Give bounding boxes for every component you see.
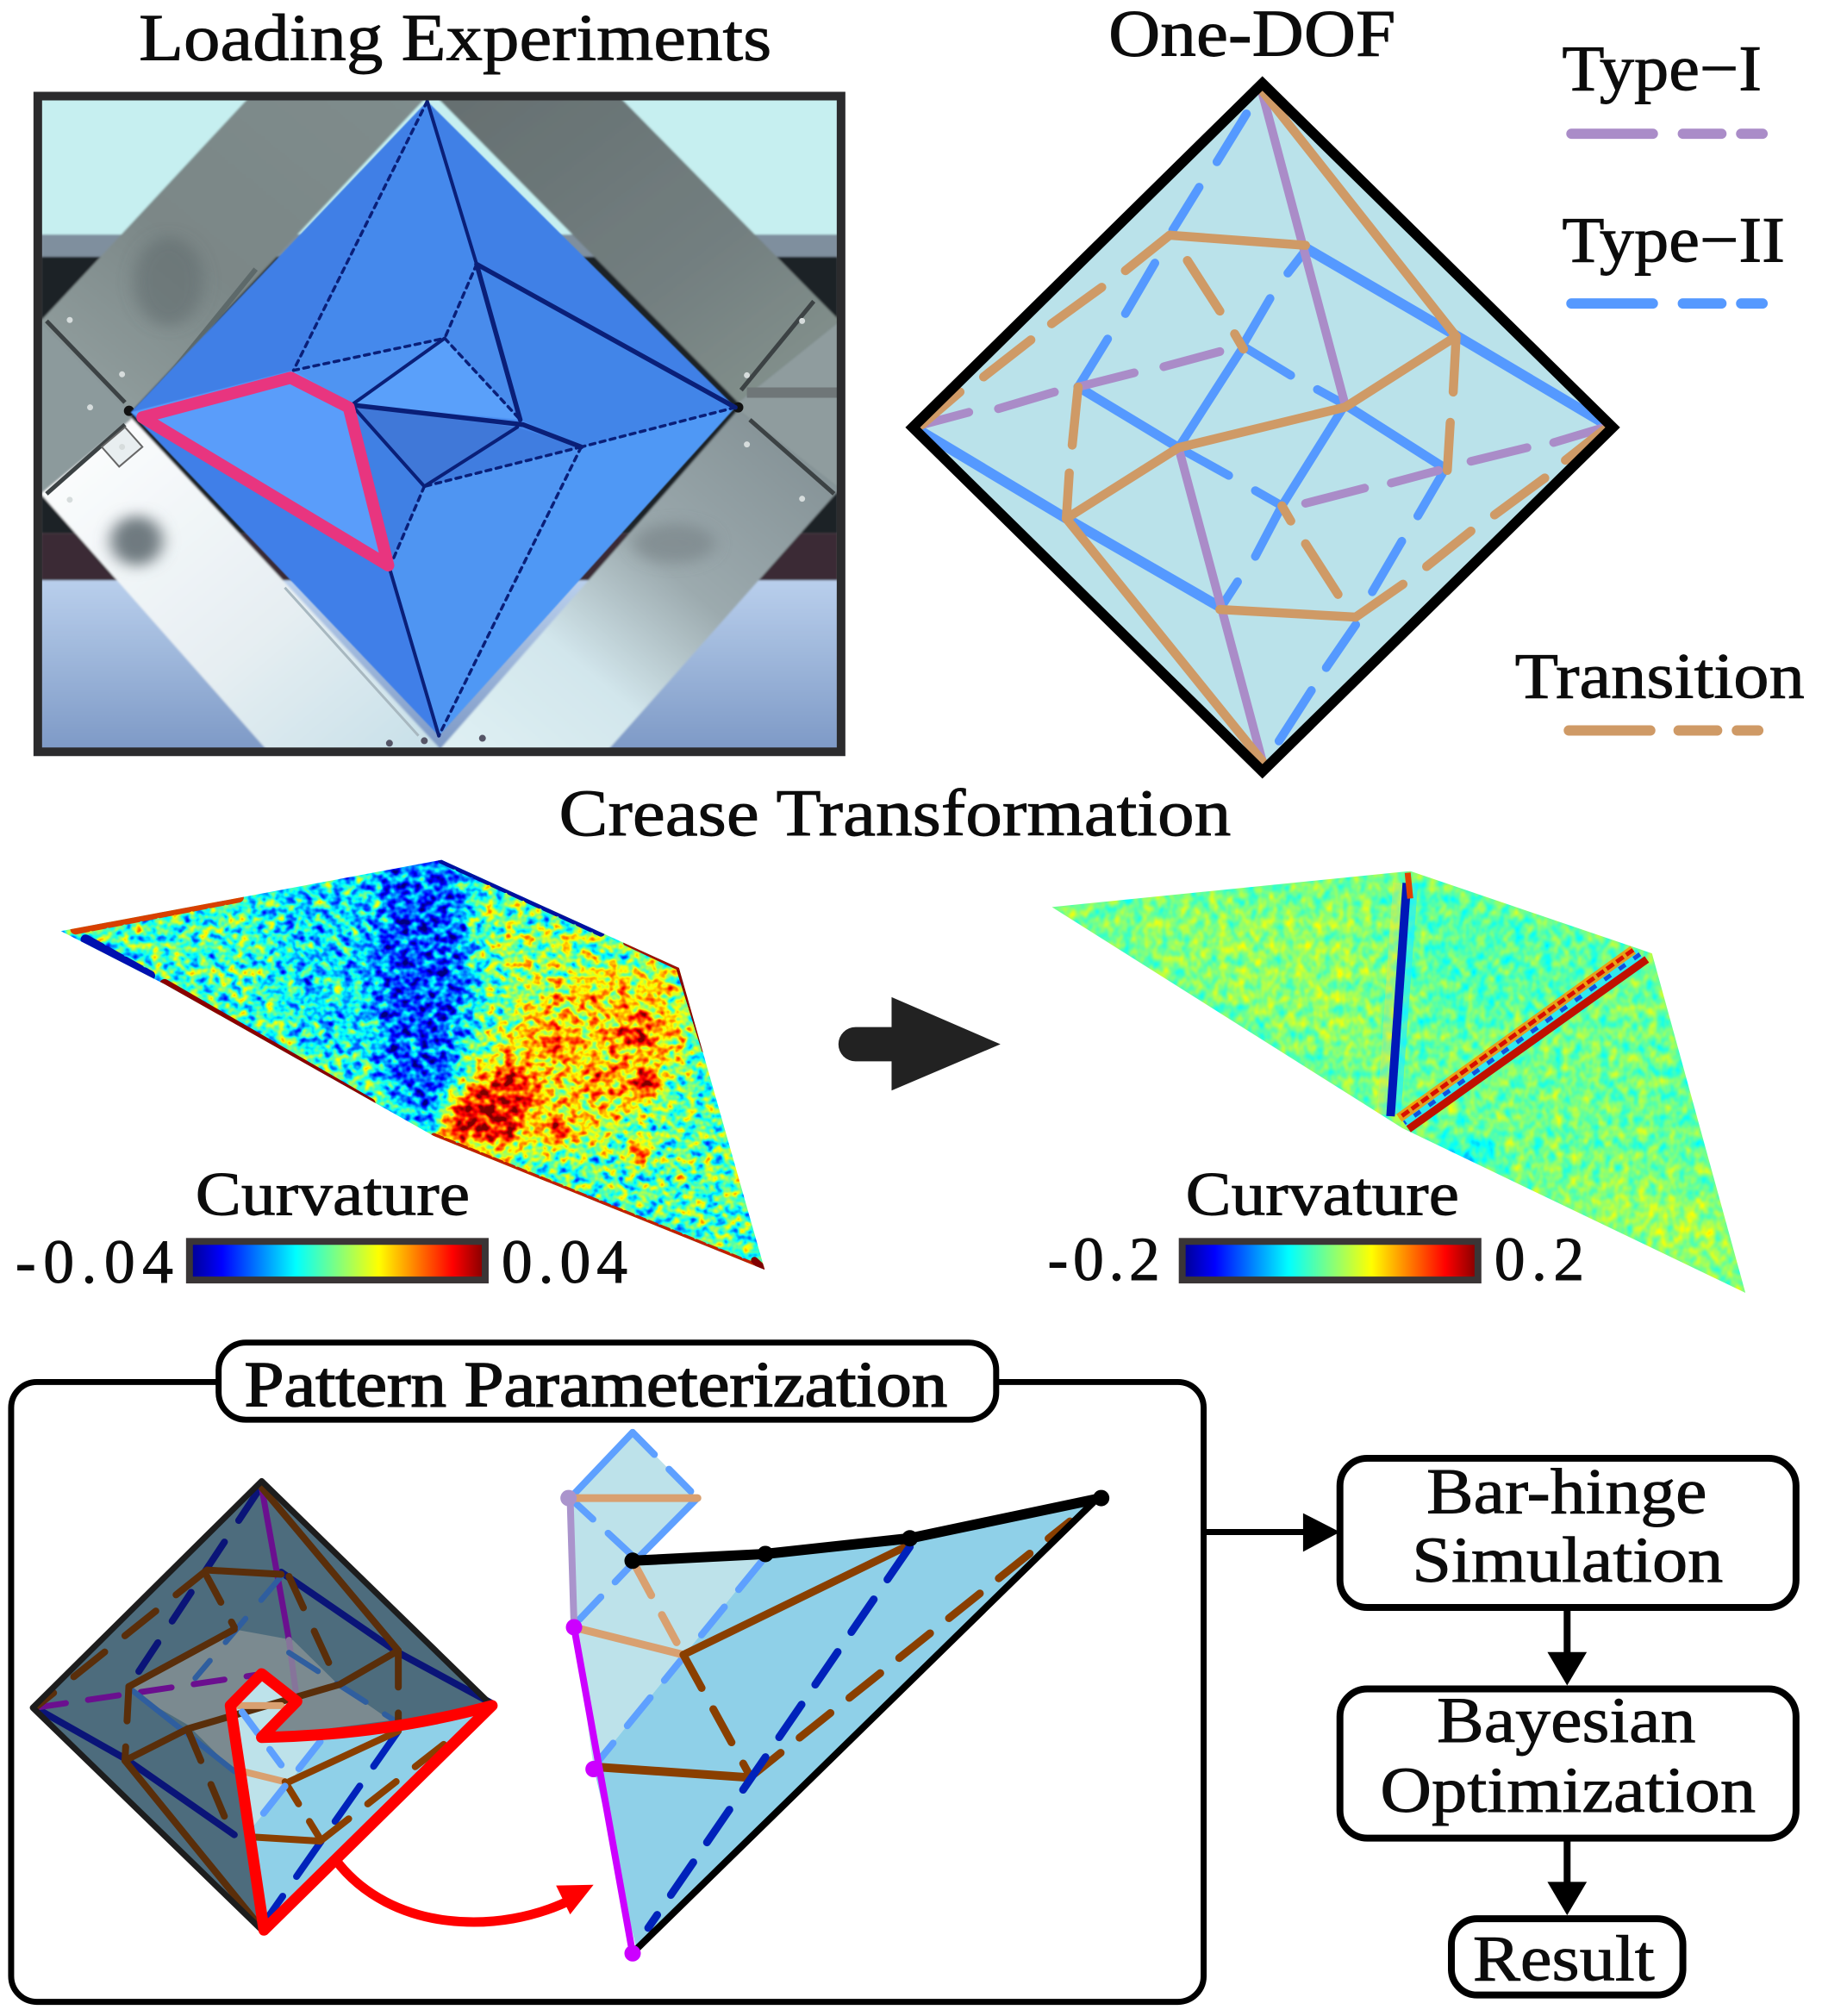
purple creases: [35, 1488, 296, 1707]
colorbar group: right curvature legend: 0.2: [1494, 1226, 1584, 1294]
red curved arrow: [336, 1860, 594, 1922]
colorbar group: left curvature legend: 0.04: [502, 1228, 627, 1296]
panel: loading experiment photo: [38, 96, 841, 752]
panel frame: [11, 1382, 1204, 2002]
pale facets: [570, 1432, 762, 1767]
blue origami sheet faces: [131, 101, 735, 736]
arrow: optimization to result: [1547, 1838, 1587, 1915]
transition creases: [921, 91, 1604, 761]
title: Loading Experiments: Loading Experiments: [139, 1, 771, 75]
panel: pattern parameterization: [11, 1343, 1204, 2002]
navy dashed crease: [648, 1547, 910, 1928]
black border: [913, 84, 1613, 771]
colorbar group: left curvature legend: [16, 1160, 627, 1296]
blue valley crease stripe: [1382, 873, 1414, 1116]
type-I creases: [921, 94, 1600, 761]
red and blue mountain crease stripe: [1399, 950, 1647, 1129]
control points: [560, 1490, 577, 1507]
box: Bayesian optimization: Optimization: [1380, 1755, 1756, 1826]
diagram: one-DOF crease pattern: [913, 84, 1613, 771]
parameter boundaries: [570, 1498, 574, 1625]
type-II creases: [919, 114, 1607, 741]
box: Bayesian optimization: Bayesian: [1437, 1685, 1695, 1757]
red unit outline: [230, 1674, 492, 1930]
title: Crease Transformation: Crease Transformation: [559, 776, 1231, 850]
mid blue creases: [133, 1576, 395, 1771]
box: bar-hinge simulation: Bar-hinge: [1426, 1457, 1707, 1528]
tan and brown creases: [570, 1498, 1070, 1777]
extracted unit cell with parameter curves: [569, 1432, 1101, 1953]
black boundary: [637, 1502, 1094, 1949]
legend: Type-I: Type−I: [1562, 33, 1762, 104]
photo frame: [38, 96, 841, 752]
colorbar group: left curvature legend: Curvature: [196, 1160, 470, 1228]
colorbar group: right curvature legend: -0.2: [1048, 1226, 1160, 1294]
sky facets: [594, 1501, 1097, 1949]
colorbar group: right curvature legend: Curvature: [1186, 1160, 1459, 1228]
dark outline: [33, 1481, 492, 1932]
box: Bayesian optimization: [1340, 1685, 1796, 1838]
dark overlay diamond: [33, 1481, 492, 1932]
unit cell facets: [230, 1674, 492, 1930]
lighter centre patch: [129, 1629, 390, 1771]
arrow: crease transformation: [839, 997, 1001, 1090]
box: result: Result: [1473, 1924, 1655, 1995]
heatmap edge artefacts: [76, 860, 764, 1270]
navy creases: [35, 1492, 492, 1915]
box: bar-hinge simulation: [1340, 1457, 1796, 1607]
pattern square: [913, 84, 1613, 771]
legend: Transition: Transition: [1515, 641, 1805, 713]
pink highlighted facet outline: [142, 378, 388, 565]
colorbar group: right curvature legend: [1048, 1160, 1584, 1294]
arrow: panel to bar-hinge simulation: [1204, 1514, 1340, 1551]
panel heading pill: Pattern Parameterization: [244, 1349, 947, 1420]
box: result: [1451, 1919, 1683, 1995]
heatmap: curvature before transformation: [52, 849, 771, 1277]
dark full pattern with red highlighted unit: [33, 1481, 594, 1932]
photo crease lines: [294, 101, 735, 736]
arrow: simulation to optimization: [1547, 1607, 1587, 1686]
light blue creases: [570, 1432, 762, 1767]
heatmap: curvature after transformation: [1042, 862, 1753, 1299]
brown creases: [35, 1488, 398, 1924]
box: bar-hinge simulation: Simulation: [1412, 1525, 1723, 1596]
colorbar group: left curvature legend: -0.04: [16, 1228, 173, 1296]
photo background and fixture: [41, 97, 840, 751]
creases inside unit cell: [238, 1706, 461, 1841]
legend: Type-II: Type−II: [1562, 204, 1785, 276]
